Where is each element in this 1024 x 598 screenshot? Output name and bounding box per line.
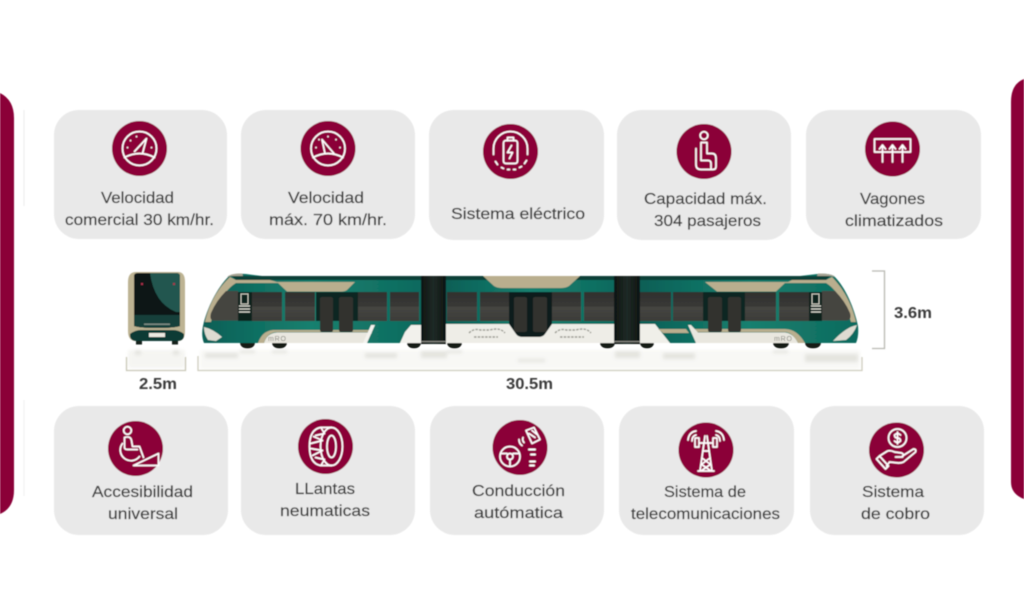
logo text on panel: mRO (774, 336, 793, 343)
icon: steering wheel and signal (492, 420, 548, 475)
white lower panel (446, 324, 614, 343)
label: neumaticas (280, 503, 370, 520)
label: Conducción (472, 483, 565, 500)
body (446, 276, 614, 343)
card background (54, 406, 228, 535)
card: vagones climatizados (806, 110, 981, 239)
label: autómatica (474, 505, 563, 522)
label: máx. 70 km/hr. (269, 212, 387, 229)
tan nose band (205, 277, 355, 322)
tan roof panel (483, 276, 580, 288)
label: Sistema de (664, 484, 746, 501)
label: climatizados (845, 213, 943, 230)
dimension label 30.5m: 30.5m (506, 376, 553, 393)
body (202, 274, 421, 343)
train reflection (128, 350, 860, 369)
front lights (141, 283, 175, 285)
icon: wheelchair on ramp (108, 421, 163, 476)
card: capacidad (617, 110, 791, 240)
card background (619, 406, 794, 535)
ornament pattern left (469, 329, 505, 337)
icon: hand holding coin (869, 422, 924, 478)
cab panel (238, 292, 252, 321)
tan trim above panel (690, 329, 805, 343)
dimension bracket: height 3.6m (872, 271, 884, 348)
train front view (128, 272, 185, 344)
tan trim above panel (258, 330, 372, 343)
icon: climate vent (865, 122, 920, 176)
front wheels (136, 339, 178, 344)
card background (241, 110, 415, 239)
tan stripe (658, 329, 689, 333)
label: 304 pasajeros (654, 213, 761, 230)
cab panel (809, 292, 822, 321)
label: telecomunicaciones (631, 506, 780, 523)
label: comercial 30 km/hr. (65, 212, 214, 229)
logo on cab panel (812, 294, 819, 304)
white rear panel (400, 325, 421, 343)
windows (252, 292, 419, 321)
nose white detail (204, 327, 222, 341)
label: Sistema eléctrico (451, 206, 585, 223)
doors (708, 297, 722, 332)
icon: speedometer (112, 121, 167, 176)
icon: seated passenger (676, 124, 732, 179)
roof stripe (446, 276, 614, 280)
door frame (703, 292, 745, 321)
white lower panel (688, 325, 798, 343)
cab text stripes (239, 306, 250, 312)
articulation joints (421, 276, 640, 344)
logo text on panel: mRO (268, 336, 287, 343)
windshield (210, 291, 238, 320)
icon: speedometer at high speed (300, 121, 356, 176)
roof stripe (640, 276, 830, 280)
card background (810, 406, 984, 535)
logo on cab panel (241, 294, 248, 304)
roof stripe (232, 276, 421, 280)
label: Sistema (862, 484, 924, 501)
card: sistema electrico (429, 110, 604, 240)
body (640, 274, 858, 343)
label: de cobro (861, 506, 930, 523)
card: velocidad maxima (241, 110, 415, 239)
front destination sign (144, 324, 170, 325)
card background (806, 110, 981, 239)
dimension label 3.6m: 3.6m (894, 305, 932, 322)
door frame (509, 292, 552, 337)
nose cap (817, 273, 835, 277)
windows (447, 292, 614, 321)
door frame (316, 292, 358, 321)
icon: tire (298, 419, 353, 474)
wheels (240, 343, 821, 348)
icon: antenna tower (678, 422, 734, 478)
nose white detail (833, 325, 857, 341)
ornament pattern right (555, 329, 591, 337)
right side bar (1011, 79, 1024, 499)
windows (640, 292, 809, 321)
train side view (202, 273, 858, 348)
windshield (822, 291, 850, 320)
card: llantas (241, 406, 415, 535)
card: accesibilidad (54, 406, 228, 535)
label: Velocidad (101, 190, 174, 207)
tan nose band (705, 277, 856, 322)
dimension label 2.5m: 2.5m (139, 376, 177, 393)
label: Accesibilidad (92, 484, 193, 501)
front windscreen (134, 273, 180, 328)
white lower panel (264, 332, 372, 343)
middle car (446, 276, 614, 343)
dimension bracket: length 30.5m (198, 356, 862, 370)
card: telecomunicaciones (619, 406, 794, 535)
label: universal (108, 506, 178, 523)
card background (430, 406, 604, 535)
faint guide line lower (24, 400, 25, 496)
card background (429, 110, 604, 240)
white slash (363, 325, 375, 343)
front car (202, 273, 421, 343)
white front panel (640, 324, 670, 343)
front teal graphic (150, 273, 180, 312)
left side bar (0, 93, 14, 514)
rear car (640, 273, 858, 343)
card: conduccion (430, 406, 604, 535)
card background (54, 110, 227, 239)
dimension bracket: width 2.5m (126, 357, 186, 370)
doors (514, 297, 527, 332)
front body (128, 272, 185, 341)
front number plate (149, 333, 165, 337)
card background (617, 110, 791, 240)
card: sistema de cobro (810, 406, 984, 535)
doors (320, 297, 333, 332)
label: Velocidad (288, 190, 364, 207)
label: Vagones (860, 191, 925, 208)
card background (241, 406, 415, 535)
front lower panel (130, 330, 184, 341)
icon: battery (483, 124, 538, 179)
cab text stripes (811, 306, 821, 312)
card: velocidad comercial (54, 110, 227, 239)
faint guide line upper (24, 110, 25, 206)
front destination panel (134, 315, 180, 328)
label: LLantas (295, 481, 355, 498)
label: Capacidad máx. (644, 191, 767, 208)
nose cap (227, 273, 243, 277)
